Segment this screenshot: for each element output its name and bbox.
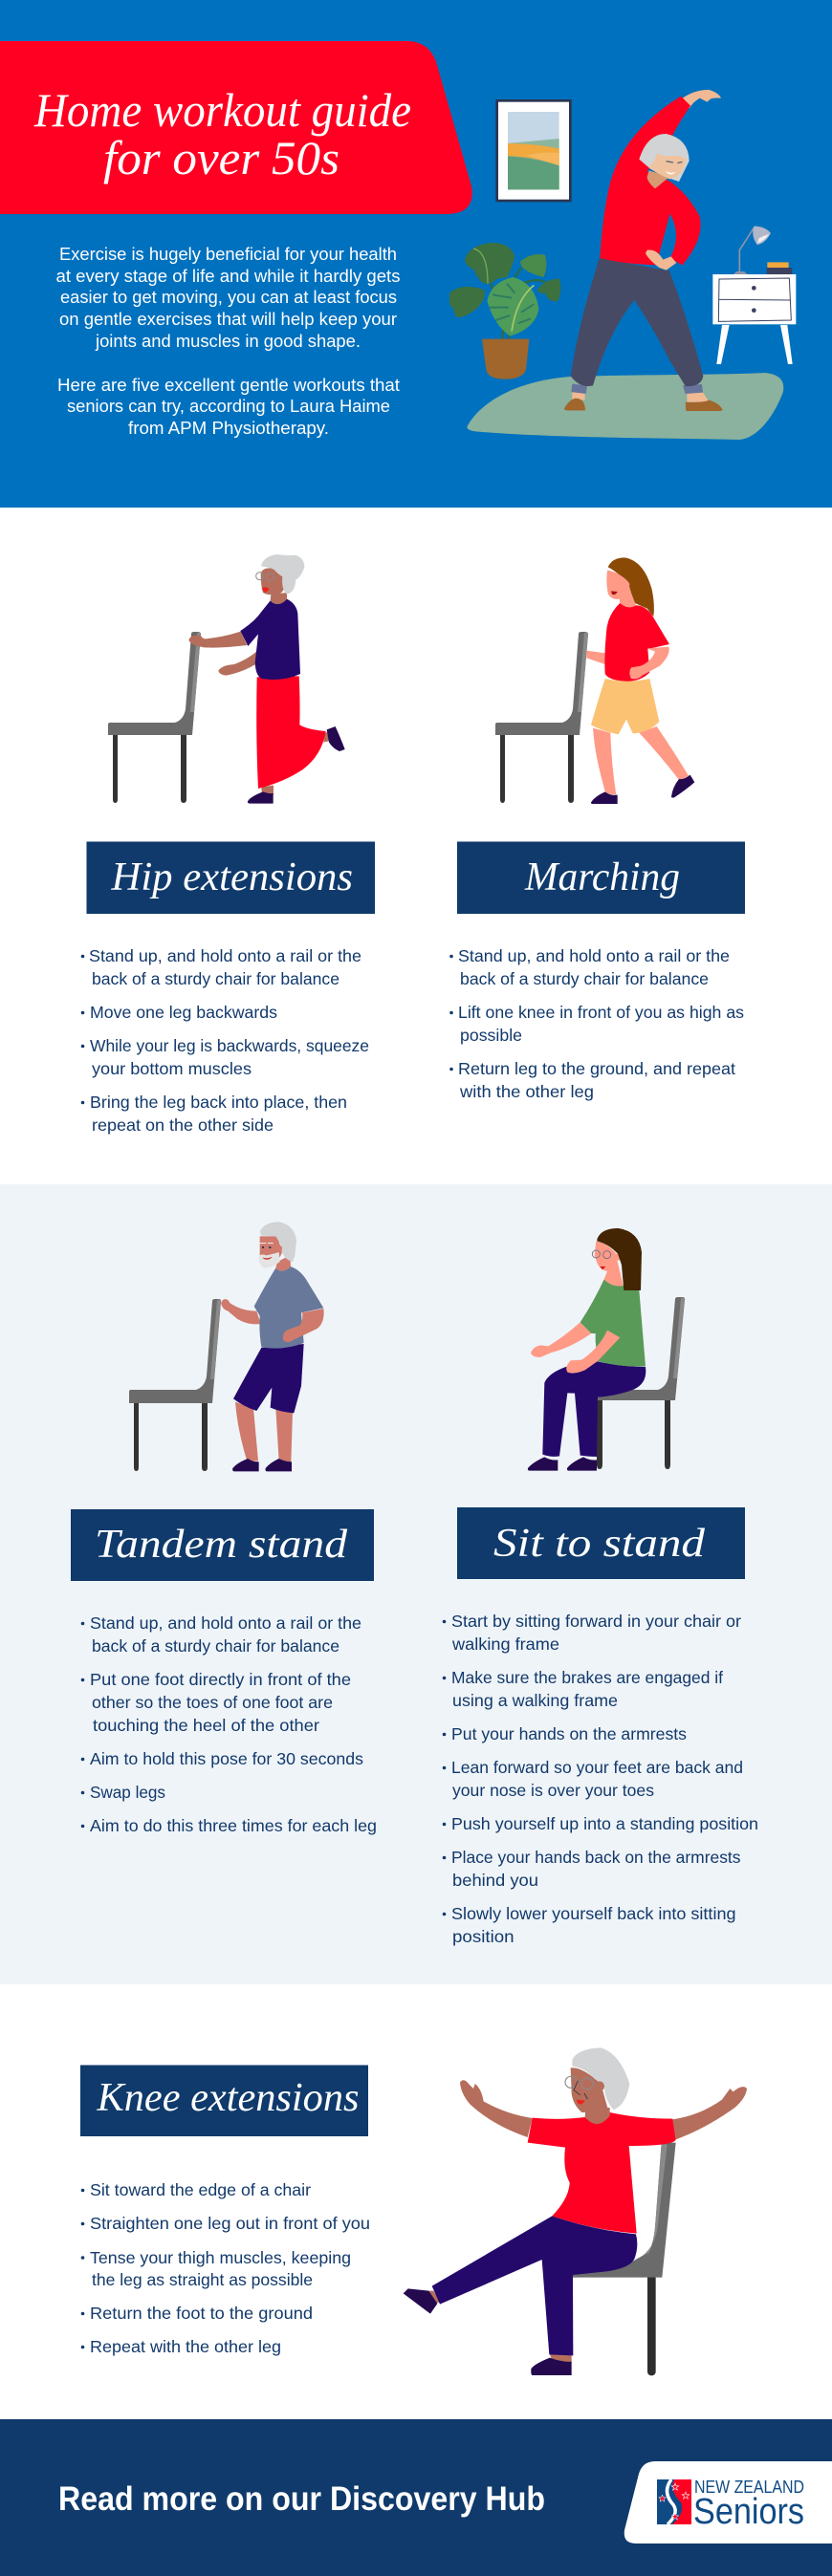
bullet list: sit to stand: your nose is over your toes bbox=[452, 1781, 654, 1800]
bullet list: sit to stand bbox=[443, 1612, 758, 1946]
bullet list: tandem stand: Aim to do this three times for each leg bbox=[90, 1816, 377, 1835]
bullet list: knee extensions: Repeat with the other leg bbox=[90, 2337, 281, 2356]
intro text bbox=[55, 245, 400, 438]
intro text: at every stage of life and while it hardly gets bbox=[55, 267, 400, 286]
bullet list: hip extensions bbox=[81, 946, 369, 1135]
bullet list: hip extensions: Move one leg backwards bbox=[90, 1003, 277, 1022]
bullet list: sit to stand: walking frame bbox=[451, 1634, 559, 1654]
illustration: marching bbox=[495, 557, 694, 804]
bullet list: sit to stand: Lean forward so your feet are back and bbox=[451, 1758, 743, 1777]
bullet list: hip extensions: repeat on the other side bbox=[92, 1115, 274, 1135]
bullet list: tandem stand: back of a sturdy chair for balance bbox=[92, 1636, 339, 1656]
heading: tandem stand: Tandem stand bbox=[95, 1523, 348, 1567]
intro text: from APM Physiotherapy. bbox=[128, 419, 329, 438]
panel: hero bbox=[0, 0, 832, 508]
bullet list: sit to stand: behind you bbox=[452, 1871, 538, 1890]
bullet list: knee extensions: Straighten one leg out in front of you bbox=[90, 2214, 370, 2233]
logo: New Zealand Seniors bbox=[624, 2461, 832, 2544]
rug bbox=[467, 373, 783, 440]
nightstand with lamp bbox=[712, 227, 796, 364]
intro text: Here are five excellent gentle workouts that bbox=[57, 376, 400, 395]
illustration: sit to stand bbox=[528, 1228, 685, 1471]
title: Home workout guide bbox=[33, 83, 411, 137]
bullet list: marching: back of a sturdy chair for balance bbox=[460, 969, 709, 988]
woman bbox=[188, 554, 345, 804]
illustration: room with stretching woman bbox=[449, 90, 796, 440]
bullet list: tandem stand: Stand up, and hold onto a rail or the bbox=[90, 1613, 361, 1633]
bullet list: marching: possible bbox=[460, 1026, 522, 1045]
panel: tandem stand and sit to stand bbox=[0, 1184, 832, 1984]
bullet list: hip extensions: While your leg is backwards, squeeze bbox=[90, 1036, 369, 1055]
bullet list: sit to stand: using a walking frame bbox=[452, 1691, 618, 1710]
shirt bbox=[600, 97, 701, 265]
logo wordmark: NEW ZEALAND bbox=[694, 2478, 804, 2497]
bullet list: marching: Lift one knee in front of you as high as bbox=[458, 1003, 744, 1022]
heading: tandem stand bbox=[71, 1509, 374, 1581]
bullet list: tandem stand: other so the toes of one foot are bbox=[92, 1693, 333, 1712]
bullet list: hip extensions: back of a sturdy chair for balance bbox=[92, 969, 339, 988]
chair bbox=[129, 1299, 221, 1471]
trousers bbox=[571, 258, 703, 386]
bullet list: hip extensions: your bottom muscles bbox=[92, 1059, 252, 1078]
heading: sit to stand: Sit to stand bbox=[493, 1522, 706, 1566]
ankles bbox=[428, 2291, 572, 2363]
bullet list: hip extensions: Bring the leg back into place, then bbox=[90, 1093, 347, 1112]
bullet list: knee extensions: the leg as straight as possible bbox=[92, 2270, 313, 2289]
title: for over 50s bbox=[103, 131, 339, 184]
intro text: seniors can try, according to Laura Haime bbox=[67, 397, 390, 416]
illustration: knee extensions bbox=[404, 2047, 747, 2375]
heading: sit to stand bbox=[457, 1507, 745, 1579]
bullet list: marching: with the other leg bbox=[459, 1082, 594, 1101]
stretching woman bbox=[564, 90, 723, 411]
bullet list: knee extensions: Tense your thigh muscles, keeping bbox=[90, 2248, 351, 2267]
bullet list: sit to stand: Make sure the brakes are engaged if bbox=[451, 1668, 723, 1687]
illustration: hip extensions bbox=[108, 554, 345, 804]
bullet list: tandem stand bbox=[81, 1613, 377, 1835]
bullet list: tandem stand: Aim to hold this pose for 30 seconds bbox=[90, 1749, 363, 1768]
panel: knee extensions bbox=[0, 1984, 832, 2419]
woman bbox=[528, 1228, 646, 1471]
bullet list: sit to stand: Place your hands back on the armrests bbox=[451, 1848, 741, 1867]
illustration: tandem stand bbox=[129, 1222, 324, 1471]
chair bbox=[495, 632, 588, 803]
picture frame bbox=[495, 99, 572, 202]
heading: marching bbox=[457, 841, 745, 914]
logo mark bbox=[657, 2479, 691, 2524]
bullet list: sit to stand: position bbox=[452, 1927, 515, 1946]
trousers bbox=[432, 2216, 637, 2355]
panel: footer bbox=[0, 2419, 832, 2576]
chair bbox=[597, 1297, 685, 1469]
hand on hip bbox=[646, 249, 676, 271]
intro text: joints and muscles in good shape. bbox=[95, 332, 361, 351]
heading: knee extensions: Knee extensions bbox=[96, 2076, 359, 2120]
neck bbox=[647, 170, 669, 188]
bullet list: knee extensions bbox=[81, 2180, 370, 2356]
heading: hip extensions bbox=[86, 841, 375, 914]
logo wordmark bbox=[693, 2478, 804, 2532]
bullet list: sit to stand: Put your hands on the armrests bbox=[451, 1724, 687, 1743]
man bbox=[221, 1222, 324, 1471]
heading: knee extensions bbox=[80, 2065, 368, 2136]
feet bbox=[572, 393, 710, 402]
title bbox=[33, 83, 411, 184]
call to action: Read more on our Discovery Hub bbox=[58, 2480, 545, 2518]
title banner bbox=[0, 41, 472, 214]
woman bbox=[586, 557, 694, 804]
head bbox=[565, 2047, 629, 2124]
bullet list: knee extensions: Return the foot to the ground bbox=[90, 2304, 313, 2323]
bullet list: marching bbox=[449, 946, 744, 1101]
intro text: Exercise is hugely beneficial for your health bbox=[59, 245, 397, 264]
chair bbox=[108, 632, 201, 803]
bullet list: marching: Return leg to the ground, and repeat bbox=[458, 1059, 735, 1078]
shoes bbox=[404, 2288, 572, 2375]
plant bbox=[449, 243, 560, 339]
shirt bbox=[528, 2112, 676, 2234]
bullet list: tandem stand: Put one foot directly in front of the bbox=[90, 1670, 351, 1689]
logo wordmark: Seniors bbox=[693, 2492, 804, 2532]
bullet list: sit to stand: Slowly lower yourself back into sitting bbox=[451, 1904, 736, 1923]
bullet list: marching: Stand up, and hold onto a rail or the bbox=[458, 946, 730, 965]
panel: hip extensions and marching bbox=[0, 508, 832, 1184]
cuffs bbox=[571, 384, 703, 394]
bullet list: knee extensions: Sit toward the edge of a chair bbox=[90, 2180, 311, 2199]
chair bbox=[573, 2143, 676, 2375]
heading: hip extensions: Hip extensions bbox=[110, 855, 353, 899]
arms bbox=[460, 2080, 533, 2137]
plant pot bbox=[482, 339, 529, 379]
hair and face bbox=[639, 134, 690, 182]
bullet list: sit to stand: Start by sitting forward in your chair or bbox=[451, 1612, 741, 1631]
bullet list: sit to stand: Push yourself up into a standing position bbox=[451, 1814, 758, 1833]
intro text: on gentle exercises that will help keep your bbox=[59, 310, 397, 329]
bullet list: tandem stand: Swap legs bbox=[90, 1783, 165, 1802]
heading: marching: Marching bbox=[524, 855, 680, 899]
bullet list: tandem stand: touching the heel of the other bbox=[93, 1716, 319, 1735]
raised hand bbox=[682, 90, 721, 108]
intro text: easier to get moving, you can at least focus bbox=[60, 288, 397, 307]
bullet list: hip extensions: Stand up, and hold onto a rail or the bbox=[89, 946, 361, 965]
